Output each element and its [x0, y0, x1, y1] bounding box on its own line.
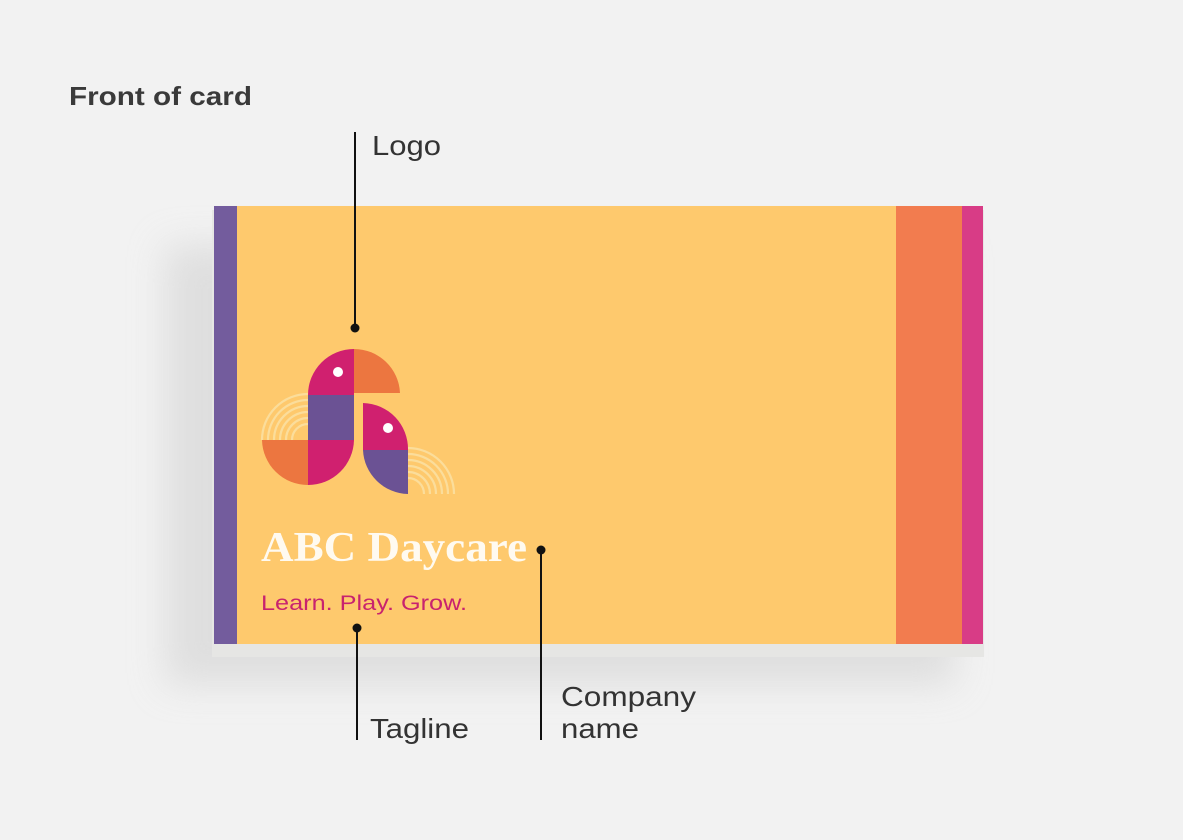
- callout: logo: [350, 130, 441, 332]
- company name: ABC Daycare: [261, 525, 527, 571]
- icon: logo: [262, 349, 454, 494]
- callout: tagline: [352, 624, 469, 744]
- callout: company name: name: [561, 713, 639, 744]
- callout: logo: Logo: [372, 130, 441, 161]
- card shadow: [165, 245, 955, 685]
- callout: company name: Company: [561, 681, 696, 712]
- callout: company name: [536, 546, 696, 744]
- tagline: Learn. Play. Grow.: [261, 592, 467, 615]
- panel: business card: [212, 206, 984, 657]
- callout: tagline: Tagline: [370, 713, 469, 744]
- title: Front of card: [69, 81, 252, 111]
